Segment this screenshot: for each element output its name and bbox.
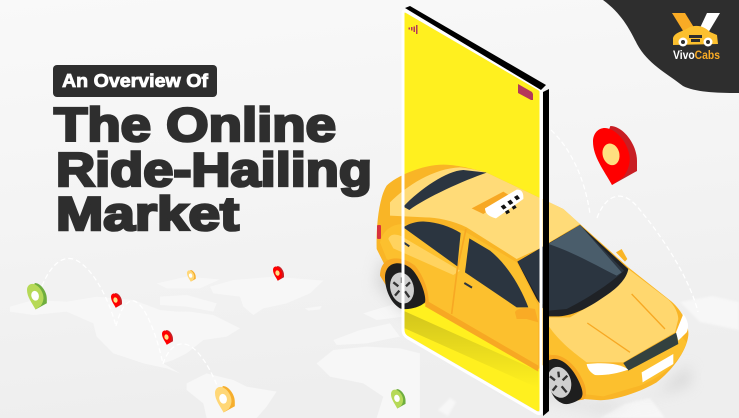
roof rear window [403,170,487,210]
phone screen [404,13,540,411]
screen: battery icon [518,84,533,100]
route dashes: world map [42,130,698,388]
front grille [623,332,678,371]
car roof [390,167,580,259]
windshield frame [517,225,628,316]
front wheel [543,355,586,404]
car shadow on screen [404,311,538,388]
heading line 2: Ride-Hailing [56,143,372,196]
door seam [452,229,466,314]
title block [53,65,372,240]
side window [465,238,528,307]
heading line 1: The Online [54,98,336,151]
logo mark [672,13,720,46]
logo corner [603,0,739,93]
rear window [403,222,461,266]
pin: green small [391,389,406,408]
licence plate [642,354,673,382]
black top edge [405,6,546,90]
screen: signal icon [408,25,418,34]
mirror left [515,308,538,322]
car body [377,165,688,400]
tail light [377,225,381,239]
pin: red large [593,126,637,185]
roof sign [472,190,523,218]
logo wordmark: VivoCabs [673,48,720,62]
pin: green large [27,283,47,310]
pin: yellow small [187,270,196,282]
pin: red route 1 [111,293,122,308]
hood creases [587,294,665,352]
door handles [403,242,472,288]
pin: yellow large [215,386,235,413]
world map [10,277,420,418]
tag pill: An Overview Of [62,70,209,91]
tag pill [53,65,217,97]
lower sill [425,301,538,372]
black side edge [543,89,549,416]
windshield reflection [548,225,622,276]
rear wheel [380,258,429,309]
pin: red route 2 [162,330,173,345]
phone frame [403,6,549,416]
headlight left [587,363,628,375]
white bezel [403,11,541,414]
car side panels [380,224,538,366]
hood [548,269,678,362]
car ground shadow [375,255,690,412]
windshield glass [518,225,624,311]
heading line 3: Market [56,187,239,240]
headlight right [676,314,688,341]
pin: red north [273,266,284,281]
taxi car [377,165,688,404]
mirror right [616,249,627,262]
front fender and bumper [548,322,687,396]
corner blob [603,0,739,93]
side highlight [388,235,460,275]
map: eastern continents [438,296,739,418]
